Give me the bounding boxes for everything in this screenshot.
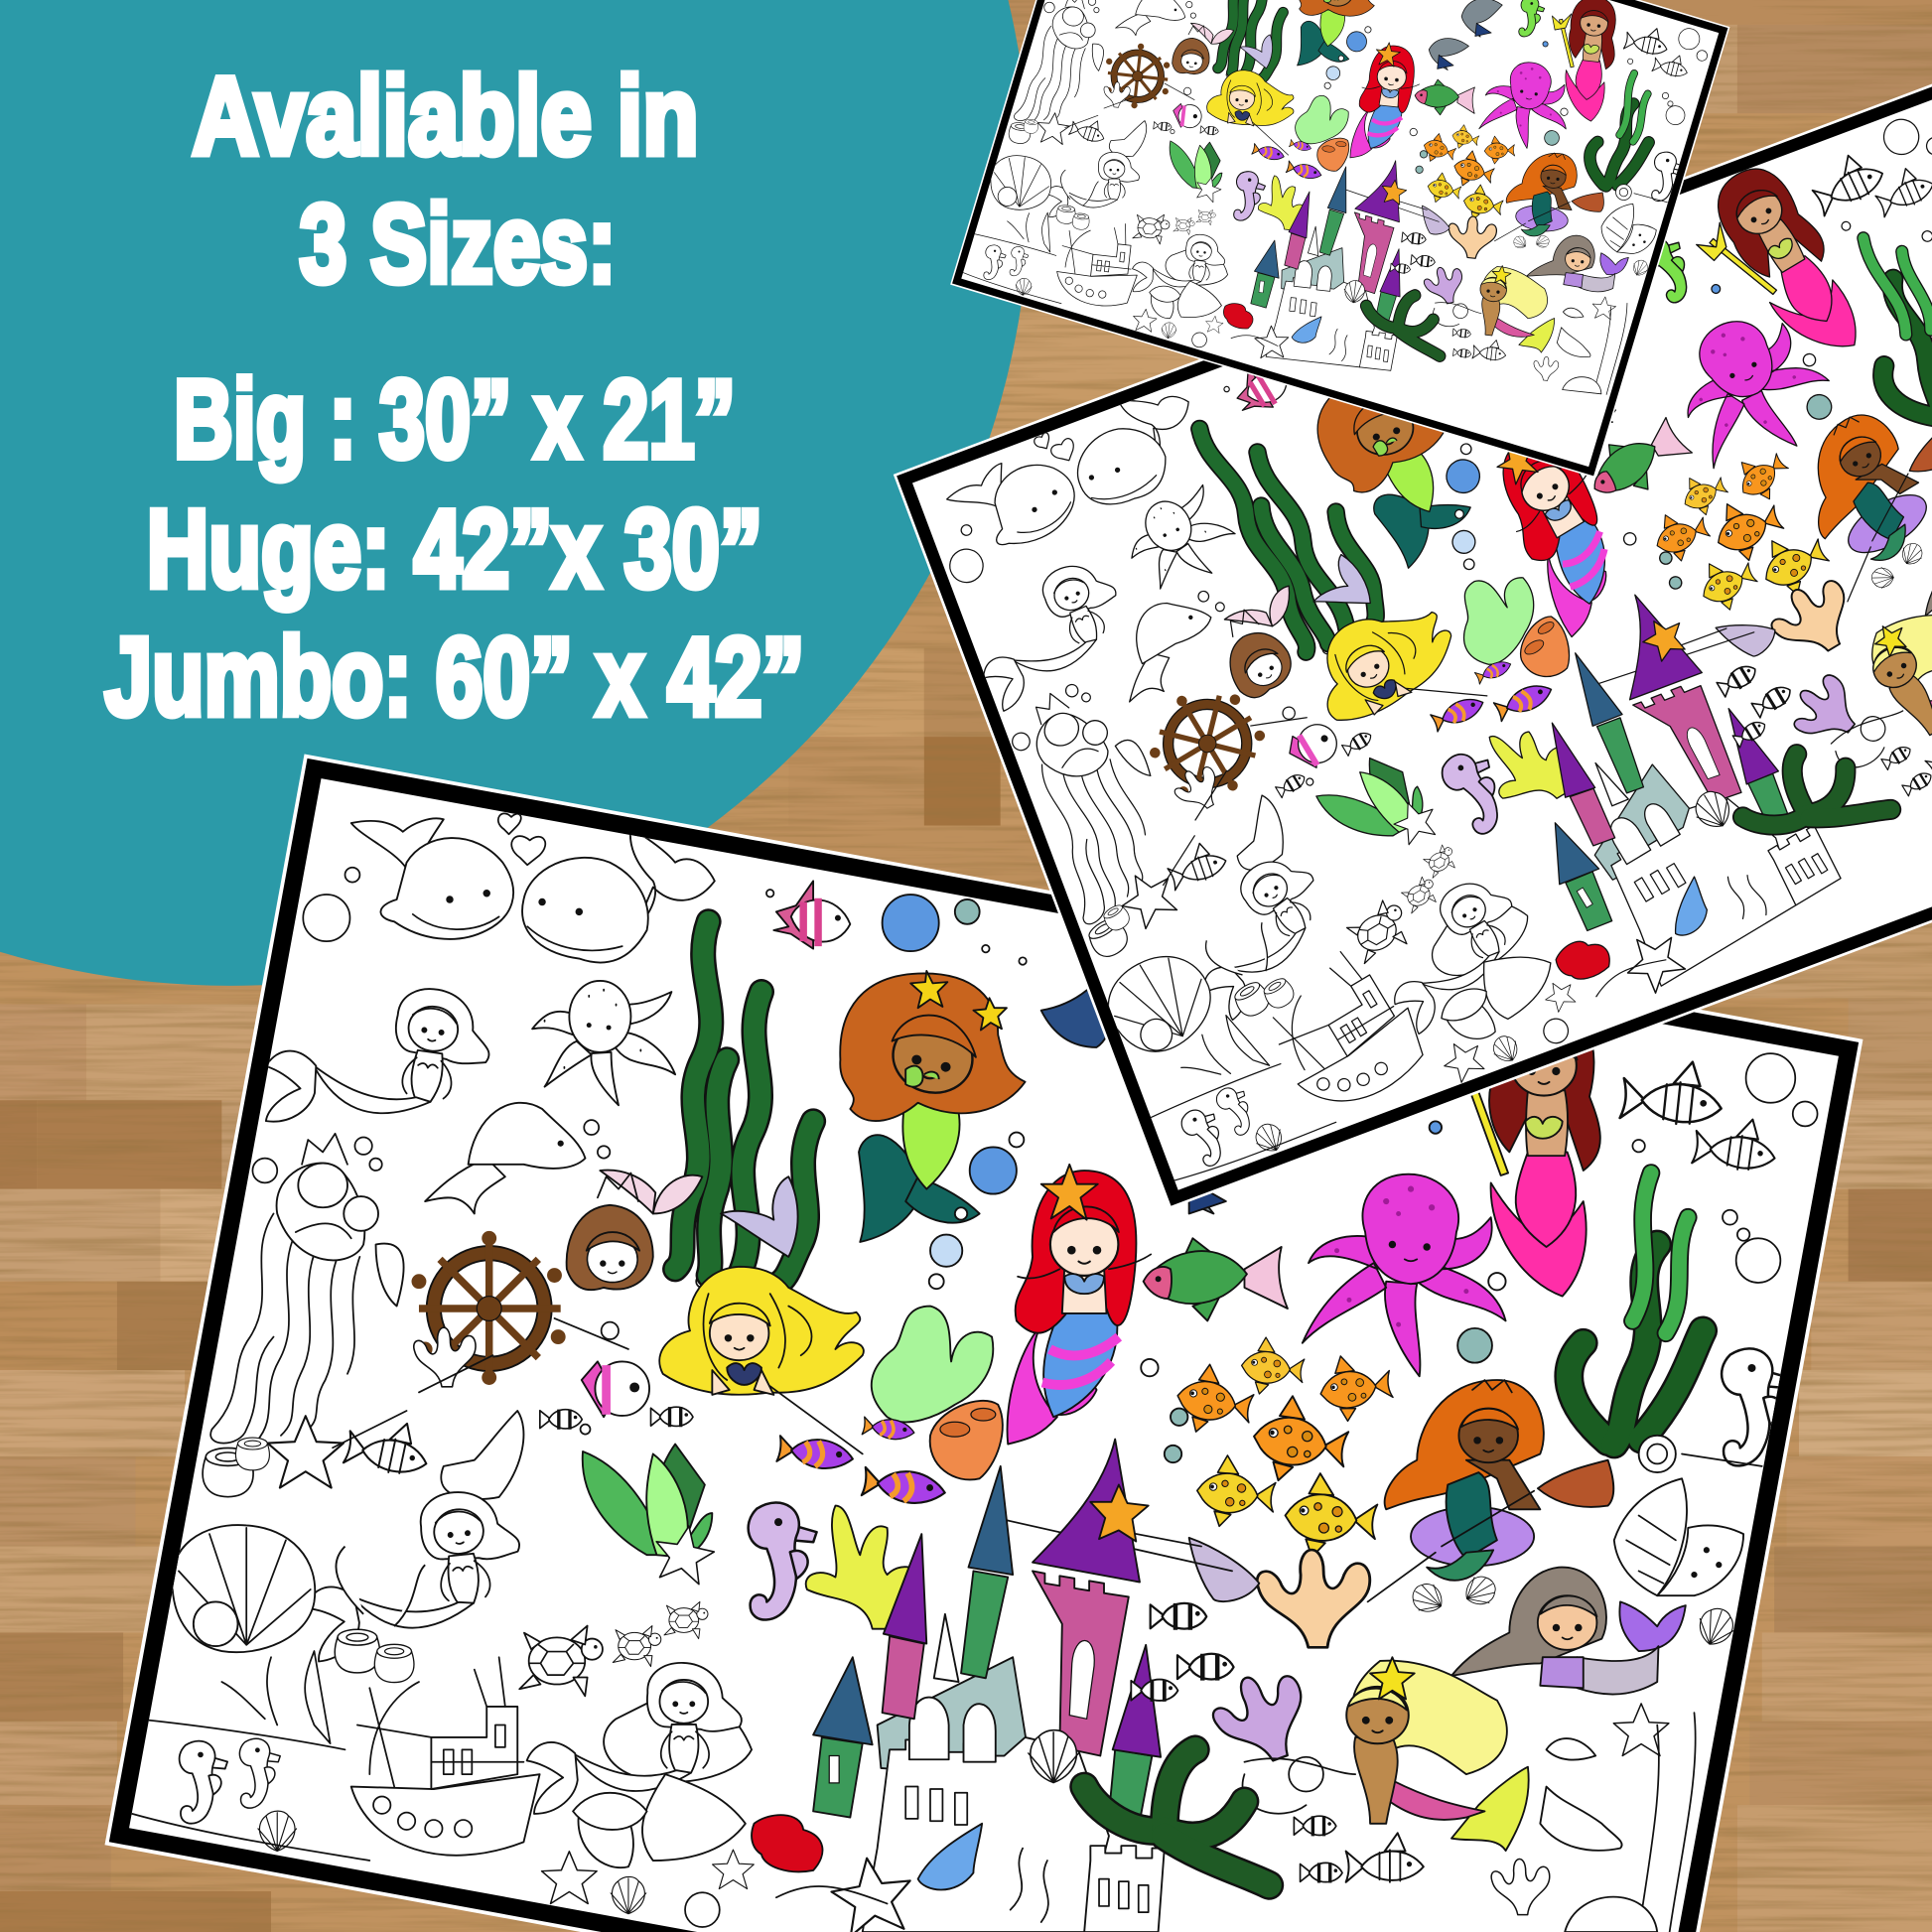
castle roof grey <box>878 1657 1033 1780</box>
size line: Big: Big : 30” x 21” <box>174 356 736 481</box>
outline fish top right <box>1620 1055 1779 1174</box>
outline pots and fish left <box>203 1318 863 1497</box>
ship wheel <box>412 1231 566 1385</box>
striped pink fish <box>773 881 850 949</box>
outline clam shell mermaid <box>172 1525 425 1683</box>
lilac spiral shell <box>1189 1538 1259 1601</box>
panel: huge poster <box>772 0 1932 1382</box>
heading: Avaliable in: Avaliable in <box>193 54 699 178</box>
connecting line <box>986 1453 1762 1601</box>
lilac coral <box>1204 1662 1319 1775</box>
green leaf plant <box>583 1445 712 1559</box>
spotted fish school <box>1173 1335 1395 1561</box>
snail shell <box>1639 1436 1676 1472</box>
panel: jumbo poster <box>104 755 1863 1932</box>
lilac seahorse <box>749 1503 817 1620</box>
outline turtles <box>519 1601 1177 1702</box>
unicorn horn turret <box>934 1614 959 1682</box>
castle main wall <box>863 1737 1109 1932</box>
purple cone with star <box>1033 1440 1140 1583</box>
small clown fish <box>540 1407 693 1430</box>
outline whales and hearts <box>351 813 715 963</box>
manta ray blue <box>1041 961 1113 1047</box>
brunette mermaid with bunny-ear tail <box>567 1171 702 1290</box>
dark green kelp <box>1084 1749 1269 1885</box>
trident mermaid <box>1445 1004 1600 1297</box>
outline queen mermaid with long hair <box>210 1134 404 1444</box>
outline mermaid <box>259 967 497 1151</box>
outline stars bottom <box>268 1416 916 1932</box>
outline seaweed and shells <box>123 1651 1048 1927</box>
panel: big poster <box>937 0 1743 487</box>
green seahorse <box>1368 1021 1424 1116</box>
outline octopus <box>532 981 675 1105</box>
kelp right <box>1569 1173 1703 1445</box>
mermaid tail behind blonde <box>721 1176 798 1257</box>
right purple cone tower <box>1109 1749 1152 1821</box>
red mermaid <box>1008 1165 1151 1445</box>
left blue cone tower <box>813 1737 863 1818</box>
kelp group green <box>675 921 813 1288</box>
grey-haired mermaid <box>1451 1568 1686 1694</box>
grey dolphins <box>1165 1036 1324 1213</box>
coloured bubbles <box>883 895 1506 1462</box>
orange barrel sponge <box>930 1401 1003 1479</box>
outline seahorses <box>180 1738 280 1824</box>
pink tower <box>1033 1571 1129 1756</box>
blonde mermaid <box>659 1267 864 1395</box>
dark orange mermaid on purple shell <box>1385 1380 1544 1581</box>
green fish <box>1144 1238 1288 1320</box>
outline dolphin <box>425 1103 586 1213</box>
outline leaf shells <box>1614 1478 1743 1595</box>
outline mermaid centre <box>527 1663 752 1867</box>
red pot <box>752 1815 822 1871</box>
outline bubbles right <box>1632 1053 1818 1283</box>
teal circle panel <box>0 0 1031 986</box>
scallop shell at castle <box>1029 1730 1078 1782</box>
green thin tower <box>961 1571 1008 1678</box>
peach coral <box>1257 1550 1370 1647</box>
castle <box>813 1440 1165 1932</box>
yellow coral <box>806 1506 921 1629</box>
magenta octopus <box>1303 1174 1506 1376</box>
outline seahorse right <box>1722 1348 1790 1465</box>
right white tower <box>1084 1846 1165 1932</box>
purple fish trio <box>776 1416 947 1507</box>
outline sunken ship <box>351 1657 540 1856</box>
heading: 3 Sizes: 3 Sizes: <box>300 182 617 306</box>
light green coral <box>872 1307 993 1422</box>
yellow-haired mermaid <box>1346 1657 1529 1851</box>
left purple cone tower <box>883 1636 924 1719</box>
star on plant <box>650 1521 718 1586</box>
size line: Jumbo: Jumbo: 60” x 42” <box>104 615 804 739</box>
brown shell <box>1538 1460 1613 1507</box>
orange-brown mermaid <box>840 971 1026 1242</box>
blue spiral shell <box>918 1824 982 1889</box>
outline mermaid with crown <box>295 1411 529 1662</box>
pink clown fish <box>582 1361 649 1417</box>
size line: Huge: Huge: 42”x 30” <box>147 486 762 611</box>
outline items lower right <box>1151 1571 1738 1932</box>
outline bubbles left <box>252 868 1027 1435</box>
